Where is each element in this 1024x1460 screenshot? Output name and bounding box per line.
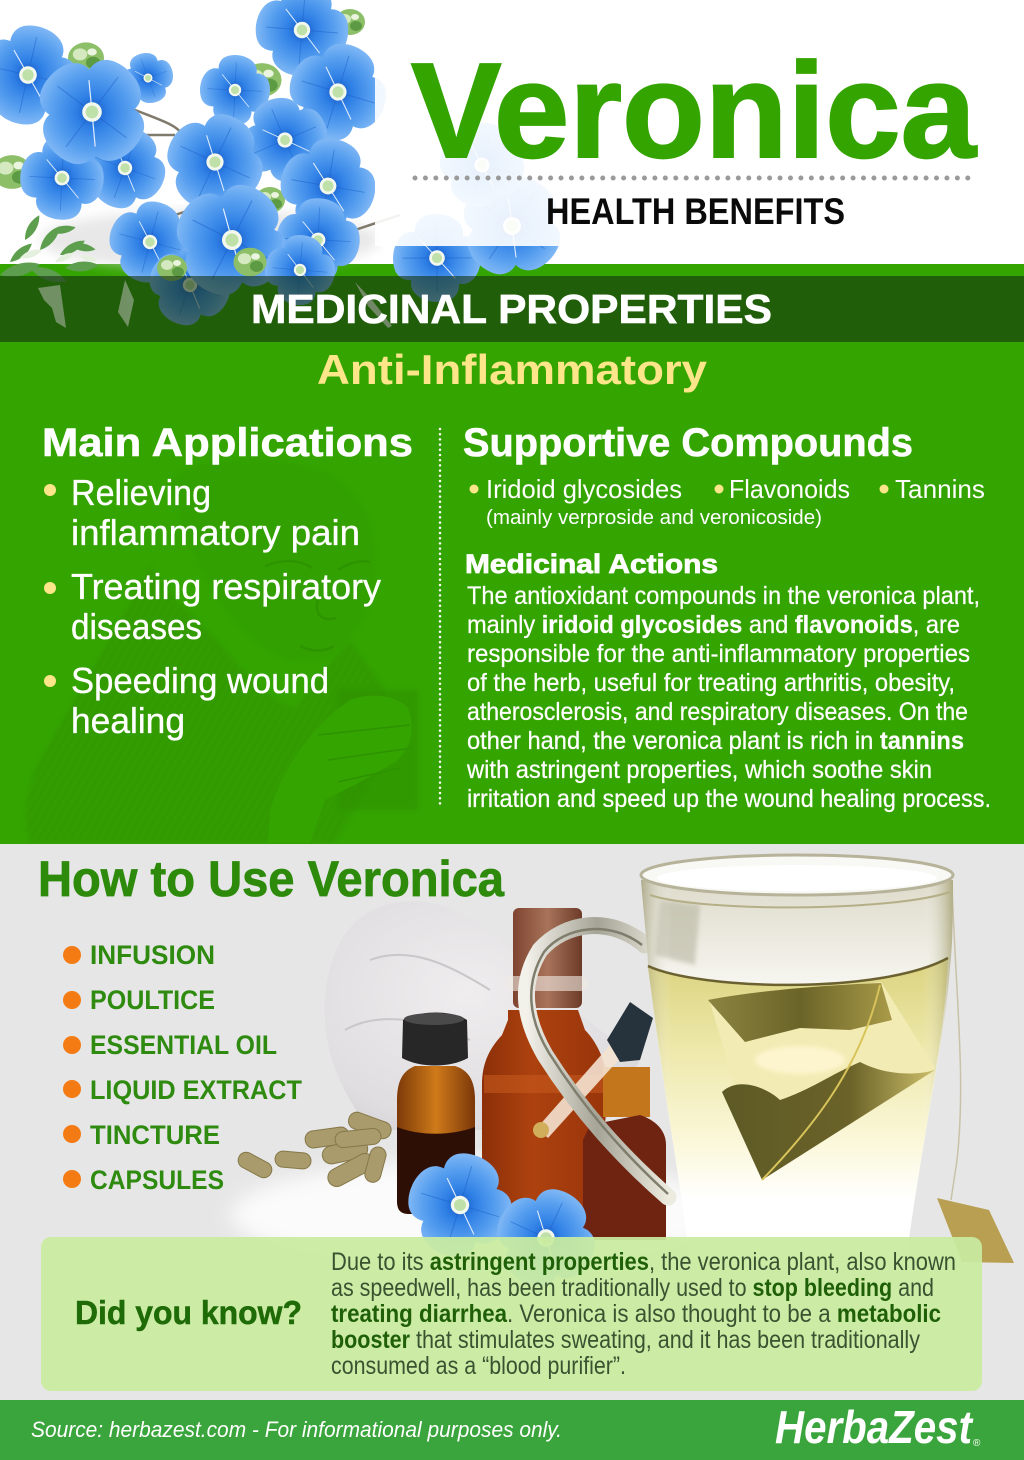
callout text: as speedwell, has been traditionally used to stop bleeding and: [331, 1274, 934, 1302]
medicinal actions paragraph: other hand, the veronica plant is rich in tannins: [467, 727, 964, 755]
heading: main applications: Main Applications: [42, 421, 413, 465]
bullet: speeding wound healing: healing: [71, 700, 185, 741]
compound: iridoid glycosides: Iridoid glycosides: [486, 474, 682, 504]
bullet: relieving inflammatory pain: [44, 472, 360, 553]
panel: translucent white title backdrop: [375, 0, 1024, 246]
medicinal actions paragraph: responsible for the anti-inflammatory properties: [467, 640, 970, 668]
glass mug: [641, 855, 953, 1260]
compound: flavonoids: Flavonoids: [729, 474, 850, 504]
callout text: Due to its astringent properties, the veronica plant, also known: [331, 1248, 956, 1276]
heading: anti-inflammatory: Anti-Inflammatory: [317, 346, 708, 393]
panel: how to use: [0, 844, 1024, 1400]
photo: woman holding a glass (green tinted): [26, 460, 418, 843]
logo: HerbaZest: HerbaZest: [775, 1401, 973, 1453]
use: infusion: INFUSION: [90, 940, 215, 970]
heading: how to use veronica: How to Use Veronica: [38, 851, 505, 907]
callout text: booster that stimulates sweating, and it has been traditionally: [331, 1326, 920, 1354]
footer bar: [0, 1400, 1024, 1460]
compound: tannins: Tannins: [895, 474, 985, 504]
use: tincture: TINCTURE: [90, 1120, 220, 1150]
bottle: large red-brown with cork: [482, 908, 607, 1234]
source text: Source: herbazest.com - For informational purposes only.: [31, 1417, 562, 1442]
title: Veronica: [411, 35, 977, 186]
compound: iridoid glycosides: [470, 474, 822, 529]
poultice cloth: [325, 901, 640, 1130]
bottle: small amber with black cap: [397, 1012, 475, 1214]
bullet: treating respiratory diseases: diseases: [71, 606, 202, 647]
medicinal actions paragraph: The antioxidant compounds in the veronica plant,: [467, 582, 980, 610]
supportive compounds column: [463, 421, 991, 813]
tea bag: [708, 982, 935, 1180]
bottle: third amber with dropper: [533, 1002, 666, 1240]
callout text: [331, 1248, 956, 1380]
bullet: relieving inflammatory pain: Relieving: [71, 472, 211, 513]
medicinal actions paragraph: atherosclerosis, and respiratory diseases. On the: [467, 698, 968, 726]
photo: remedies still life: [230, 855, 1014, 1306]
blue flowers at bottles: [393, 1138, 527, 1272]
panel: medicinal properties green background: [0, 264, 1024, 844]
callout text: consumed as a “blood purifier”.: [331, 1352, 626, 1380]
column dotted divider: [439, 429, 441, 805]
photo: veronica flowers sprig: [0, 0, 583, 339]
fern fronds over band: [38, 280, 392, 328]
glass mug handle: [526, 926, 668, 1197]
use: poultice: POULTICE: [90, 985, 215, 1015]
use: capsules: CAPSULES: [90, 1165, 224, 1195]
use: liquid extract: LIQUID EXTRACT: [90, 1075, 302, 1105]
callout: did you know: [41, 1237, 982, 1391]
bullet: relieving inflammatory pain: inflammatory pain: [71, 512, 360, 553]
medicinal actions paragraph: with astringent properties, which soothe skin: [466, 756, 932, 784]
list: uses: [63, 940, 302, 1195]
bullet: speeding wound healing: Speeding wound: [71, 660, 329, 701]
heading: supportive compounds: Supportive Compounds: [463, 421, 913, 465]
medicinal actions paragraph: [466, 582, 991, 813]
capsules: [235, 1110, 415, 1190]
panel: medicinal properties band: [0, 276, 1024, 342]
bullet: treating respiratory diseases: Treating respiratory: [71, 566, 381, 607]
use: essential oil: ESSENTIAL OIL: [90, 1030, 277, 1060]
bullet: speeding wound healing: [44, 660, 329, 741]
heading: medicinal actions: Medicinal Actions: [465, 549, 718, 579]
heading: medicinal properties: MEDICINAL PROPERTIES: [251, 286, 772, 332]
callout heading: Did you know?: [75, 1294, 302, 1331]
medicinal actions paragraph: mainly iridoid glycosides and flavonoids, are: [467, 611, 960, 639]
tea bag tag: [937, 1198, 1014, 1263]
tea bag string: [951, 885, 961, 1200]
table surface glow: [230, 1160, 730, 1270]
main applications column: [42, 421, 413, 741]
subtitle: HEALTH BENEFITS: [546, 191, 845, 232]
bullet: treating respiratory diseases: [44, 566, 381, 647]
medicinal actions paragraph: of the herb, useful for treating arthritis, obesity,: [467, 669, 955, 697]
title dotted divider: [415, 176, 978, 180]
logo: HerbaZest: ®: [973, 1438, 981, 1449]
compound: iridoid glycosides: (mainly verproside and veronicoside): [486, 507, 822, 529]
callout text: treating diarrhea. Veronica is also thought to be a metabolic: [331, 1300, 941, 1328]
medicinal actions paragraph: irritation and speed up the wound healing process.: [467, 785, 991, 813]
